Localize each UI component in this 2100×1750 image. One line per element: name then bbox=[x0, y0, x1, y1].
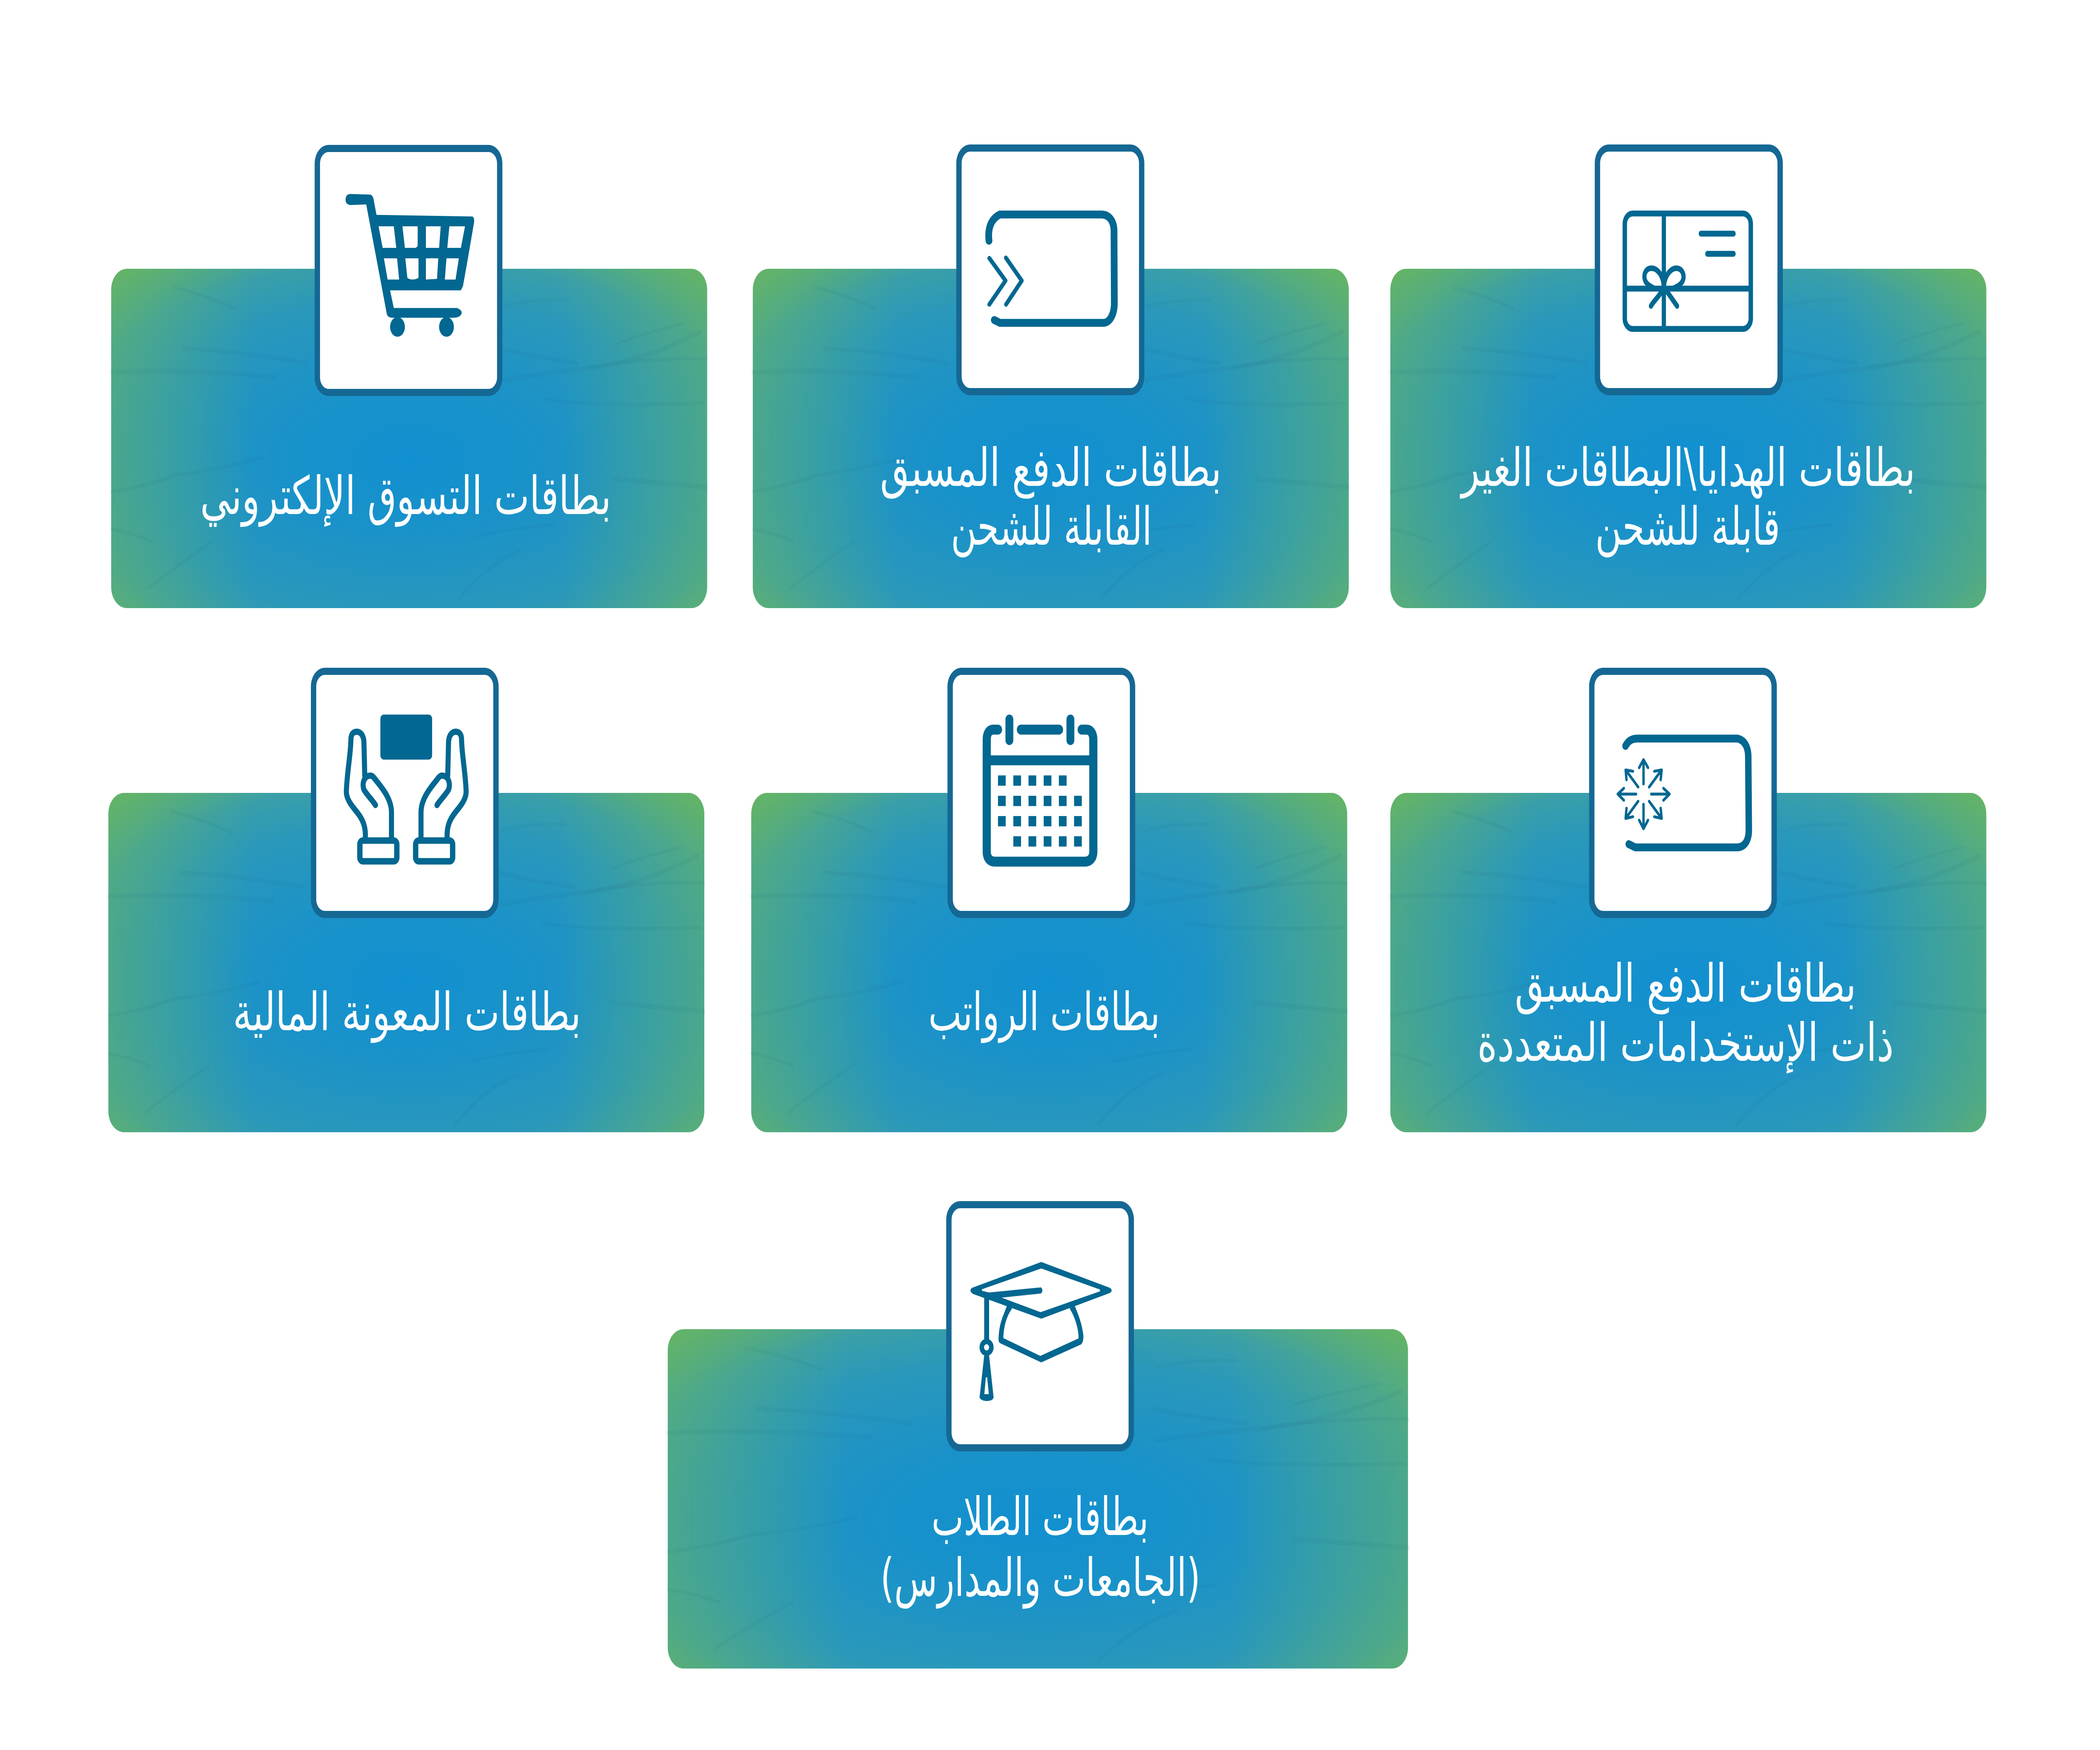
icon box: cart bbox=[318, 149, 500, 392]
label: e-shopping cards: بطاقات التسوق الإلكتروني bbox=[200, 466, 611, 527]
icon box: calendar bbox=[950, 671, 1132, 915]
icon box: hands bbox=[314, 671, 496, 915]
icon: gift card bbox=[1625, 213, 1751, 329]
label: multi-use prepaid cards: ذات الإستخدامات المتعددة bbox=[1477, 1013, 1894, 1074]
label: prepaid non-rechargeable cards: القابلة للشحن bbox=[951, 496, 1152, 558]
panel: prepaid non-rechargeable cards bbox=[753, 148, 1349, 608]
icon box: graduation cap bbox=[949, 1204, 1131, 1448]
icon: graduation cap bbox=[971, 1262, 1112, 1401]
panel: financial aid cards bbox=[108, 671, 704, 1132]
icon: calendar bbox=[987, 719, 1093, 862]
label: multi-use prepaid cards: بطاقات الدفع المسبق bbox=[1515, 953, 1856, 1015]
label: prepaid non-rechargeable cards bbox=[880, 438, 1221, 558]
panel: gift cards bbox=[1390, 148, 1986, 608]
panel: student cards bbox=[668, 1204, 1408, 1669]
icon: hands holding card bbox=[346, 714, 466, 861]
icon box: gift card bbox=[1597, 148, 1780, 391]
label: gift cards: قابلة للشحن bbox=[1595, 496, 1780, 558]
label: student cards: بطاقات الطلاب bbox=[932, 1487, 1149, 1548]
label: gift cards: بطاقات الهدايا\البطاقات الغير bbox=[1460, 438, 1915, 499]
icon: card with outward arrows bbox=[1618, 739, 1749, 847]
label: student cards: (الجامعات والمدارس) bbox=[880, 1548, 1200, 1609]
label: student cards bbox=[880, 1487, 1200, 1609]
label: financial aid cards: بطاقات المعونة المالية bbox=[233, 982, 581, 1043]
label: multi-use prepaid cards bbox=[1477, 953, 1894, 1074]
label: gift cards bbox=[1460, 438, 1915, 558]
icon: shopping cart bbox=[346, 194, 474, 337]
icon box: card with chevrons bbox=[959, 148, 1142, 391]
icon box: card with arrows bbox=[1592, 671, 1774, 915]
panel: e-shopping cards bbox=[111, 149, 707, 608]
panel: multi-use prepaid cards bbox=[1390, 671, 1986, 1132]
panel: salary cards bbox=[751, 671, 1347, 1132]
label: salary cards: بطاقات الرواتب bbox=[929, 982, 1160, 1043]
label: prepaid non-rechargeable cards: بطاقات الدفع المسبق bbox=[880, 438, 1221, 499]
icon: card with chevrons bbox=[989, 215, 1114, 323]
